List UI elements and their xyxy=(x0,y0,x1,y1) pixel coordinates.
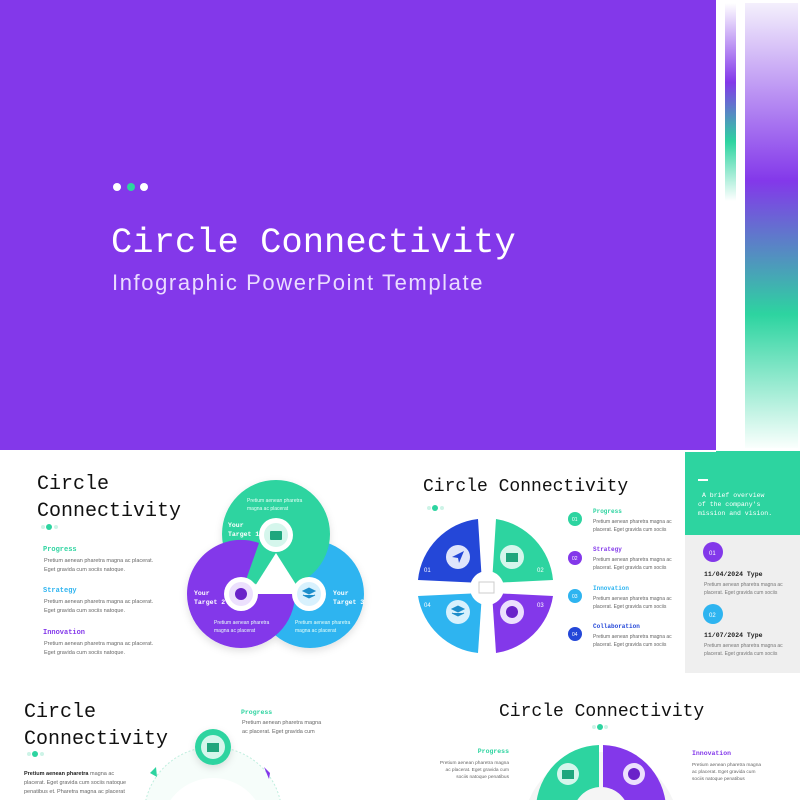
heading: Circle xyxy=(37,473,109,496)
side panel: 01 xyxy=(709,551,716,557)
body text: penatibus et. Pharetra magna ac placerat xyxy=(24,789,125,795)
venn labels: Target 2 xyxy=(194,599,225,606)
heading xyxy=(37,473,181,523)
venn labels: Pretium aenean pharetra xyxy=(247,498,303,504)
panel: slide quadrants xyxy=(418,452,800,673)
progress note xyxy=(241,709,322,735)
numbered list: Collaboration xyxy=(593,623,640,630)
numbered list: 01 xyxy=(572,517,578,523)
body text xyxy=(24,771,126,795)
body text: Pretium aenean pharetra magna ac xyxy=(24,771,114,777)
numbered list xyxy=(568,508,672,648)
notes: sociis natoque penatibus xyxy=(456,774,510,780)
notes: ac placerat. Eget gravida cum xyxy=(446,767,509,773)
gradient bar wide xyxy=(745,3,798,448)
progress note: Pretium aenean pharetra magna xyxy=(242,720,322,726)
venn labels: magna ac placerat xyxy=(295,628,337,634)
heading: Circle xyxy=(24,701,96,724)
numbered list: Pretium aenean pharetra magna ac xyxy=(593,634,672,640)
side panel: 11/07/2024 Type xyxy=(704,632,763,639)
notes: Innovation xyxy=(692,750,731,757)
text list: Eget gravida cum sociis natoque. xyxy=(44,567,125,573)
notes: Pretium aenean pharetra magna xyxy=(440,760,509,766)
body text: placerat. Eget gravida cum sociis natoque xyxy=(24,780,126,786)
panel: slide venn xyxy=(37,473,364,656)
notes: Progress xyxy=(478,748,509,755)
side panel xyxy=(685,452,800,673)
text list: Progress xyxy=(43,546,77,554)
heading: Connectivity xyxy=(37,500,181,523)
notes xyxy=(440,748,761,782)
heading: Circle Connectivity xyxy=(423,477,628,497)
venn labels: Your xyxy=(194,590,210,597)
venn labels: Your xyxy=(333,590,349,597)
numbered list: placerat. Eget gravida cum sociis xyxy=(593,565,667,571)
side panel: of the company's xyxy=(698,501,761,508)
venn labels: Target 1 xyxy=(228,531,259,538)
side panel: mission and vision. xyxy=(698,510,772,517)
venn labels xyxy=(194,498,364,634)
numbered list: Strategy xyxy=(593,546,622,553)
side panel: 11/04/2024 Type xyxy=(704,571,763,578)
text list: Innovation xyxy=(43,629,85,637)
half circle chart xyxy=(523,745,679,800)
dots xyxy=(27,751,44,757)
heading: Connectivity xyxy=(24,728,168,751)
quadrant chart: 01 xyxy=(424,568,431,574)
side panel: Pretium aenean pharetra magna ac xyxy=(704,582,783,588)
numbered list: 04 xyxy=(572,632,578,638)
numbered list: Pretium aenean pharetra magna ac xyxy=(593,557,672,563)
numbered list: placerat. Eget gravida cum sociis xyxy=(593,642,667,648)
dots xyxy=(41,524,58,530)
numbered list: 03 xyxy=(572,594,578,600)
venn labels: Pretium aenean pharetra xyxy=(295,620,351,626)
subtitle: Infographic PowerPoint Template xyxy=(112,270,484,295)
side panel: 02 xyxy=(709,613,716,619)
venn labels: Pretium aenean pharetra xyxy=(214,620,270,626)
numbered list: Pretium aenean pharetra magna ac xyxy=(593,596,672,602)
text list: Pretium aenean pharetra magna ac placerat. xyxy=(44,599,154,605)
text list xyxy=(43,546,154,656)
quadrant chart: 02 xyxy=(537,568,544,574)
numbered list: Progress xyxy=(593,508,622,515)
numbered list: placerat. Eget gravida cum sociis xyxy=(593,527,667,533)
venn diagram xyxy=(187,480,364,648)
quadrant chart xyxy=(418,519,553,653)
quadrant chart: 04 xyxy=(424,603,431,609)
notes: sociis natoque penatibus xyxy=(692,776,745,782)
progress note: ac placerat. Eget gravida cum xyxy=(242,729,315,735)
text list: Pretium aenean pharetra magna ac placerat. xyxy=(44,558,154,564)
side panel: placerat. Eget gravida cum sociis xyxy=(704,590,778,596)
venn labels: Target 3 xyxy=(333,599,364,606)
cycle diagram xyxy=(144,729,282,800)
gradient bar thin xyxy=(725,3,736,201)
dots xyxy=(113,183,148,191)
text list: Pretium aenean pharetra magna ac placerat. xyxy=(44,641,154,647)
heading: Circle Connectivity xyxy=(499,702,704,722)
title: Circle Connectivity xyxy=(111,222,516,263)
panel: slide half circle xyxy=(440,702,761,800)
notes: ac placerat. Eget gravida cum xyxy=(692,769,755,775)
panel: hero xyxy=(0,0,716,450)
numbered list: Pretium aenean pharetra magna ac xyxy=(593,519,672,525)
numbered list: Innovation xyxy=(593,585,629,592)
text list: Strategy xyxy=(43,587,77,595)
side panel: A brief overview xyxy=(702,492,765,499)
heading xyxy=(24,701,168,751)
notes: Pretium aenean pharetra magna xyxy=(692,762,761,768)
text list: Eget gravida cum sociis natoque. xyxy=(44,608,125,614)
numbered list: placerat. Eget gravida cum sociis xyxy=(593,604,667,610)
venn labels: magna ac placerat xyxy=(247,506,289,512)
text list: Eget gravida cum sociis natoque. xyxy=(44,650,125,656)
venn labels: magna ac placerat xyxy=(214,628,256,634)
side panel: Pretium aenean pharetra magna ac xyxy=(704,643,783,649)
side panel: placerat. Eget gravida cum sociis xyxy=(704,651,778,657)
icon nodes xyxy=(224,518,326,611)
numbered list: 02 xyxy=(572,556,578,562)
quadrant chart: 03 xyxy=(537,603,544,609)
dots xyxy=(427,505,444,511)
panel: slide cycle xyxy=(24,701,322,800)
progress note: Progress xyxy=(241,709,272,716)
venn labels: Your xyxy=(228,522,244,529)
